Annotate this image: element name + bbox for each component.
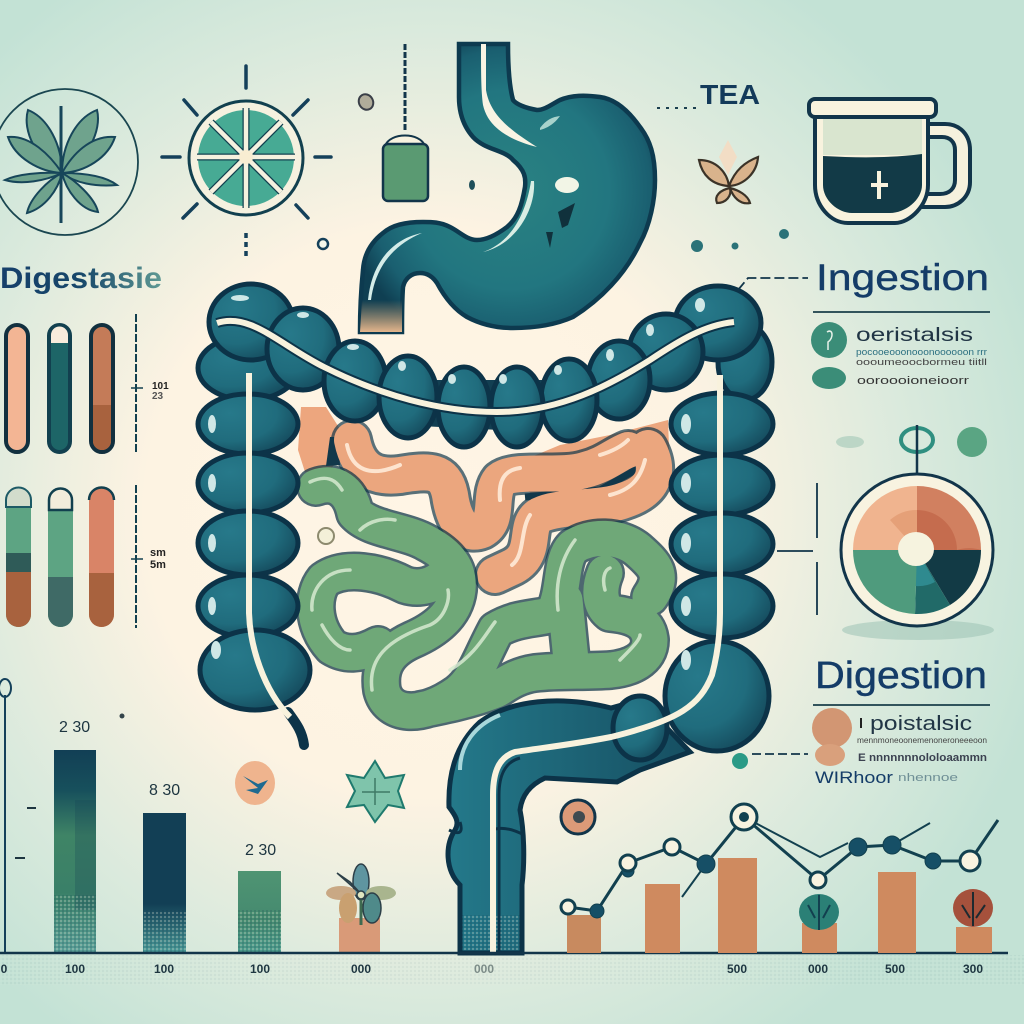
stomach [360,44,655,332]
top dashed leader [657,107,697,109]
text block: peristalsis: ooroooioneioorr [857,375,969,387]
axis labels: 000 [351,962,371,976]
axis labels: 300 [963,962,983,976]
axis labels: 100 [65,962,85,976]
axis labels: 000 [474,962,494,976]
scale marks: 5m [150,559,166,571]
icon: tea leaves [699,140,758,203]
icon: tea cup [809,99,970,223]
tea label: TEA [700,79,760,110]
text block: peristalsis 2 [812,708,987,787]
right bar and line chart [561,804,998,953]
text block: peristalsis: oeristalsis [856,325,973,346]
axis labels: 100 [250,962,270,976]
axis [0,952,1008,954]
heading: Ingestion: Ingestion [816,257,989,298]
icon: citrus slice [162,66,331,260]
axis labels: 500 [885,962,905,976]
tube chart bottom [6,488,114,627]
scale marks [131,314,169,628]
scale marks: 23 [152,391,164,402]
icon: flower [347,761,404,822]
bar chart left: 8 30 [149,782,180,799]
text block: peristalsis 2: mennmoneoonemenoneroneeeoon [857,736,987,745]
text block: peristalsis 2: E nnnnnnnololoaammn [858,752,987,764]
axis labels: 0 [1,962,8,976]
small intestine: green [310,478,657,711]
pie leader [777,483,817,615]
axis labels: 500 [727,962,747,976]
scale marks: sm [150,547,166,559]
icon: target [561,800,595,834]
bar chart left: 2 30 [59,719,90,736]
icon: hanging tag [356,44,475,201]
pie chart shadow [842,620,994,640]
text block: peristalsis: pocooeooonooonoooooon rrr [856,347,987,357]
tube chart top [6,325,113,452]
icons: small marks above pie [836,425,987,474]
teal dot with leader [732,753,808,769]
text block: peristalsis: oooumeoocbormeu tiitll [856,357,987,367]
large intestine [198,284,773,953]
orange halo behind small intestine [298,407,670,505]
text block: peristalsis 2: nhennoe [898,772,958,784]
heading: Digestion: Digestion [815,655,987,697]
leader to Ingestion [738,278,808,290]
icon: leaf circle [0,89,138,235]
bar chart left [0,679,380,953]
text block: peristalsis 2: WIRhoor [815,768,893,787]
icon: plant on bar [326,864,396,925]
axis labels: 000 [808,962,828,976]
icon: round bird [235,761,275,805]
pie chart [841,474,993,626]
scale marks: 101 [152,381,169,392]
axis labels: 100 [154,962,174,976]
text block: peristalsis 2: poistalsic [870,713,972,735]
decorative dots [691,229,789,252]
text block: peristalsis [811,322,987,389]
heading: Digestasie: Digestasie [0,262,162,295]
small intestine: orange [347,440,654,575]
bar chart left: 2 30 [245,842,276,859]
axis labels [1,962,983,976]
axis stipple strip [0,955,1024,985]
